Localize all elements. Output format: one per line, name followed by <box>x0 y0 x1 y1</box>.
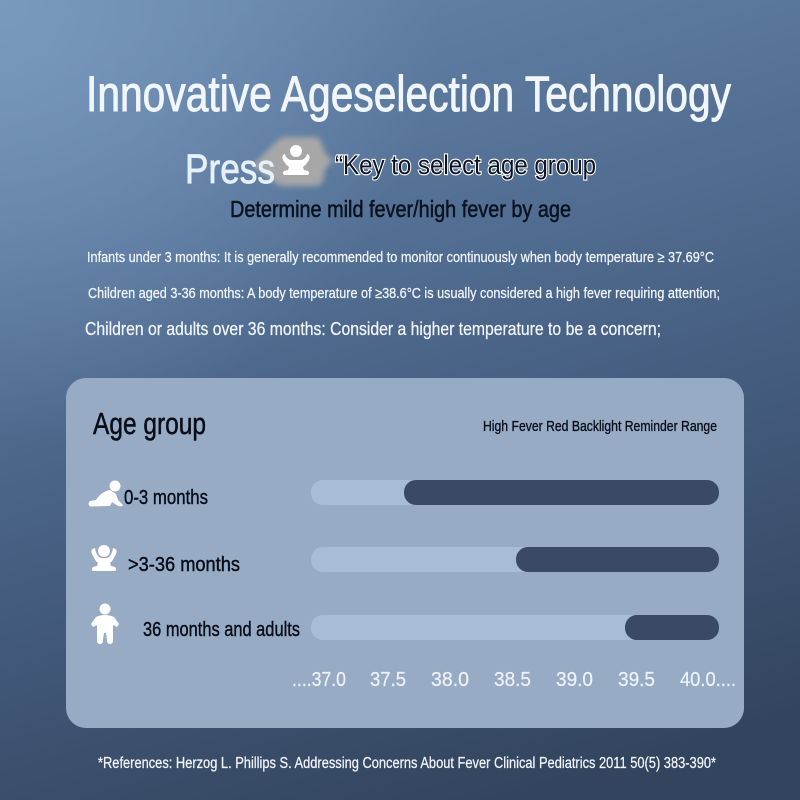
bar <box>311 615 719 640</box>
icon: seated child <box>91 545 117 571</box>
row: 0-3 months <box>88 480 719 509</box>
axis labels: 39.0 <box>556 669 593 691</box>
axis labels: 38.0 <box>431 669 469 691</box>
icon: key button with seated child <box>252 137 333 186</box>
panel: age group chart <box>66 378 744 728</box>
icon: standing child <box>91 604 119 644</box>
icon: crawling infant <box>88 480 123 506</box>
axis labels: 38.5 <box>494 669 531 691</box>
label: >3-36 months <box>128 554 240 576</box>
panel heading: Age group <box>93 406 206 441</box>
key text: “Key to select age group <box>335 150 596 180</box>
axis labels: 40.0.... <box>680 669 736 691</box>
line: adults: Children or adults over 36 months: Consider a higher temperature to be a concern; <box>85 319 661 339</box>
subheading: Determine mild fever/high fever by age <box>230 196 571 222</box>
row: >3-36 months <box>91 545 719 576</box>
word: Press: Press <box>185 145 275 192</box>
press key line <box>185 137 596 192</box>
line: children: Children aged 3-36 months: A body temperature of ≥38.6°C is usually considered a high fever requiring attention; <box>88 286 720 302</box>
legend label: High Fever Red Backlight Reminder Range <box>483 419 717 435</box>
row: 36 months and adults <box>91 604 719 644</box>
axis labels: 39.5 <box>618 669 655 691</box>
axis labels: 37.5 <box>370 669 406 691</box>
axis labels <box>292 669 736 691</box>
axis labels: ....37.0 <box>292 669 346 691</box>
label: 36 months and adults <box>143 619 300 641</box>
line: infants: Infants under 3 months: It is generally recommended to monitor continuously when body temperature ≥ 37.69°C <box>87 250 714 266</box>
text block: age guidance <box>85 250 720 339</box>
label: 0-3 months <box>124 487 208 509</box>
bar <box>311 547 719 572</box>
bar <box>311 480 719 505</box>
